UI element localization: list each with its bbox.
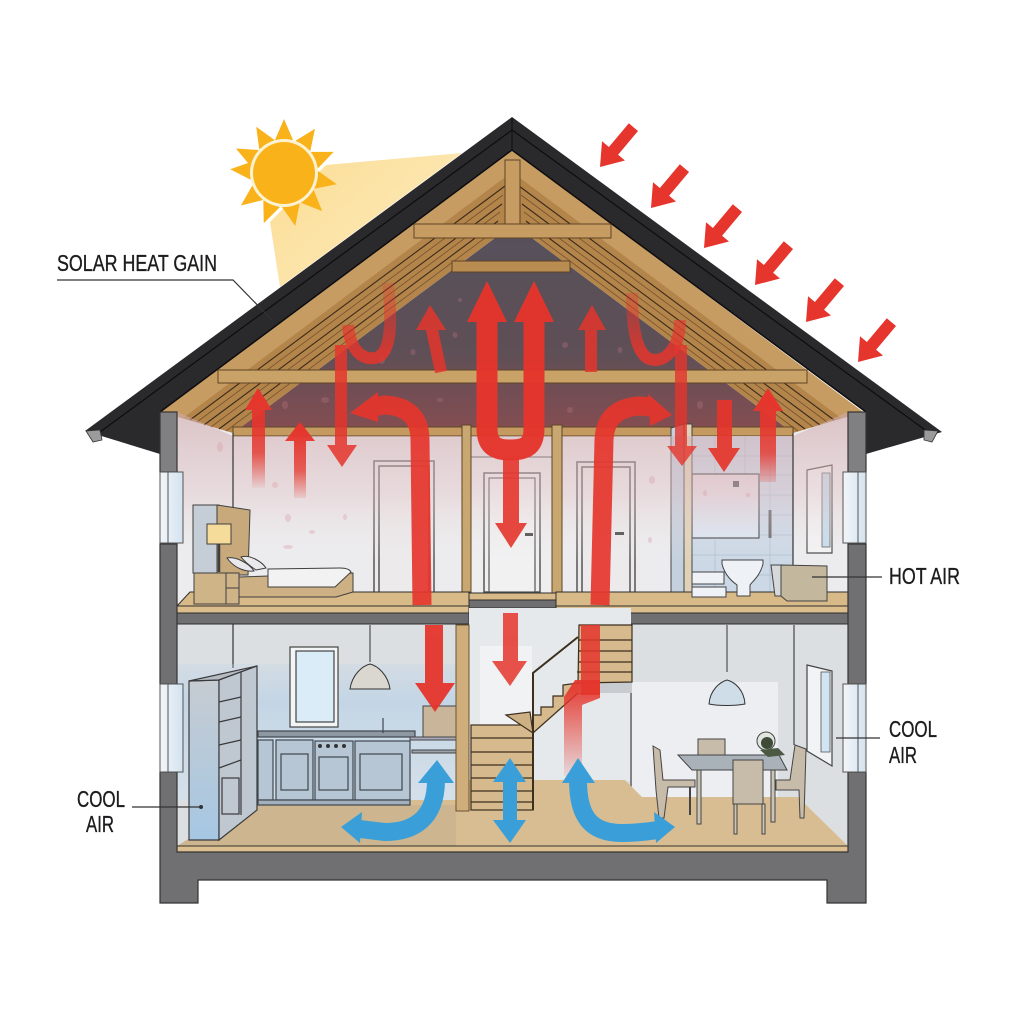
arrow: left attic U	[348, 283, 390, 358]
dining set	[653, 739, 806, 834]
label: cool air left	[77, 786, 203, 837]
label: cool air right: AIR	[889, 742, 917, 768]
kitchen base cabinets	[258, 718, 415, 805]
room heat particles	[217, 442, 750, 549]
kitchen window	[290, 647, 338, 727]
house cross-section	[85, 117, 942, 903]
arrow: centre falling	[495, 458, 527, 548]
lower floor interior	[177, 608, 849, 847]
kitchen tall cabinet	[189, 666, 257, 840]
upper floor interior	[177, 412, 849, 622]
bathroom tile wall	[692, 436, 793, 596]
label: solar heat gain	[57, 250, 272, 320]
door: right hall	[577, 462, 635, 593]
timber king post and collar beams	[218, 160, 807, 436]
attic heat particles	[282, 287, 703, 413]
arrow: attic far left rising	[245, 388, 272, 488]
upper floor slab	[177, 592, 848, 624]
arrow: stair flow	[564, 625, 600, 776]
arrow: lower floor falling centre	[492, 613, 527, 686]
label: cool air right	[836, 716, 937, 768]
solar heat beam	[270, 153, 462, 287]
label: hot air: HOT AIR	[889, 563, 960, 589]
lower right window	[807, 665, 832, 766]
arrow: right falling 1	[667, 345, 697, 466]
bathroom partition	[671, 424, 692, 599]
bedroom furniture	[193, 505, 353, 604]
wall haze: hot air in upper rooms	[177, 412, 848, 565]
right room window	[807, 465, 832, 553]
side wall corner lines	[233, 433, 793, 668]
arrow: cool double centre	[493, 758, 526, 843]
label: cool air left: AIR	[86, 811, 114, 837]
arrow: right duct turning to attic	[600, 394, 672, 605]
icon: sun	[230, 119, 339, 228]
pendant lamp kitchen	[350, 625, 390, 689]
outside red heat arrows	[589, 118, 903, 372]
label: cool air right: COOL	[889, 716, 937, 742]
arrow: right falling 2	[708, 400, 740, 472]
wall windows in section	[160, 472, 866, 772]
arrow: cool left	[341, 760, 454, 843]
door: centre	[471, 457, 552, 597]
arrow: left duct turning to attic	[350, 392, 422, 605]
kitchen box and counter	[410, 706, 456, 753]
arrow: attic rising left	[416, 305, 446, 372]
roof timber rafters	[161, 150, 863, 433]
arrow: left falling	[327, 345, 357, 467]
attic space	[233, 238, 793, 433]
structural post lower	[456, 625, 469, 811]
timber posts	[462, 425, 562, 597]
outer walls and foundation	[160, 412, 866, 903]
label: solar heat gain: SOLAR HEAT GAIN	[57, 250, 217, 276]
arrow: centre double rising	[467, 281, 554, 450]
arrow: lower floor falling left	[415, 625, 455, 712]
arrow: cool right	[562, 758, 675, 843]
lower floor	[177, 780, 848, 853]
arrow: left rising	[285, 422, 315, 498]
roof covering	[85, 117, 942, 454]
seated figure	[757, 732, 785, 757]
lower room back wall	[177, 608, 794, 800]
toilet	[692, 560, 763, 597]
staircase	[471, 625, 632, 810]
red arrows: hot air circulation	[245, 281, 783, 776]
arrow: far right rising	[753, 388, 783, 482]
label: cool air left: COOL	[77, 786, 125, 812]
arrow: attic rising right	[578, 305, 606, 372]
bathroom vanity	[771, 565, 827, 601]
arrow: right attic U	[632, 293, 680, 360]
blue arrows: cool air	[341, 758, 675, 843]
door: bedroom	[374, 461, 434, 594]
dining pendant lamp	[709, 625, 745, 706]
